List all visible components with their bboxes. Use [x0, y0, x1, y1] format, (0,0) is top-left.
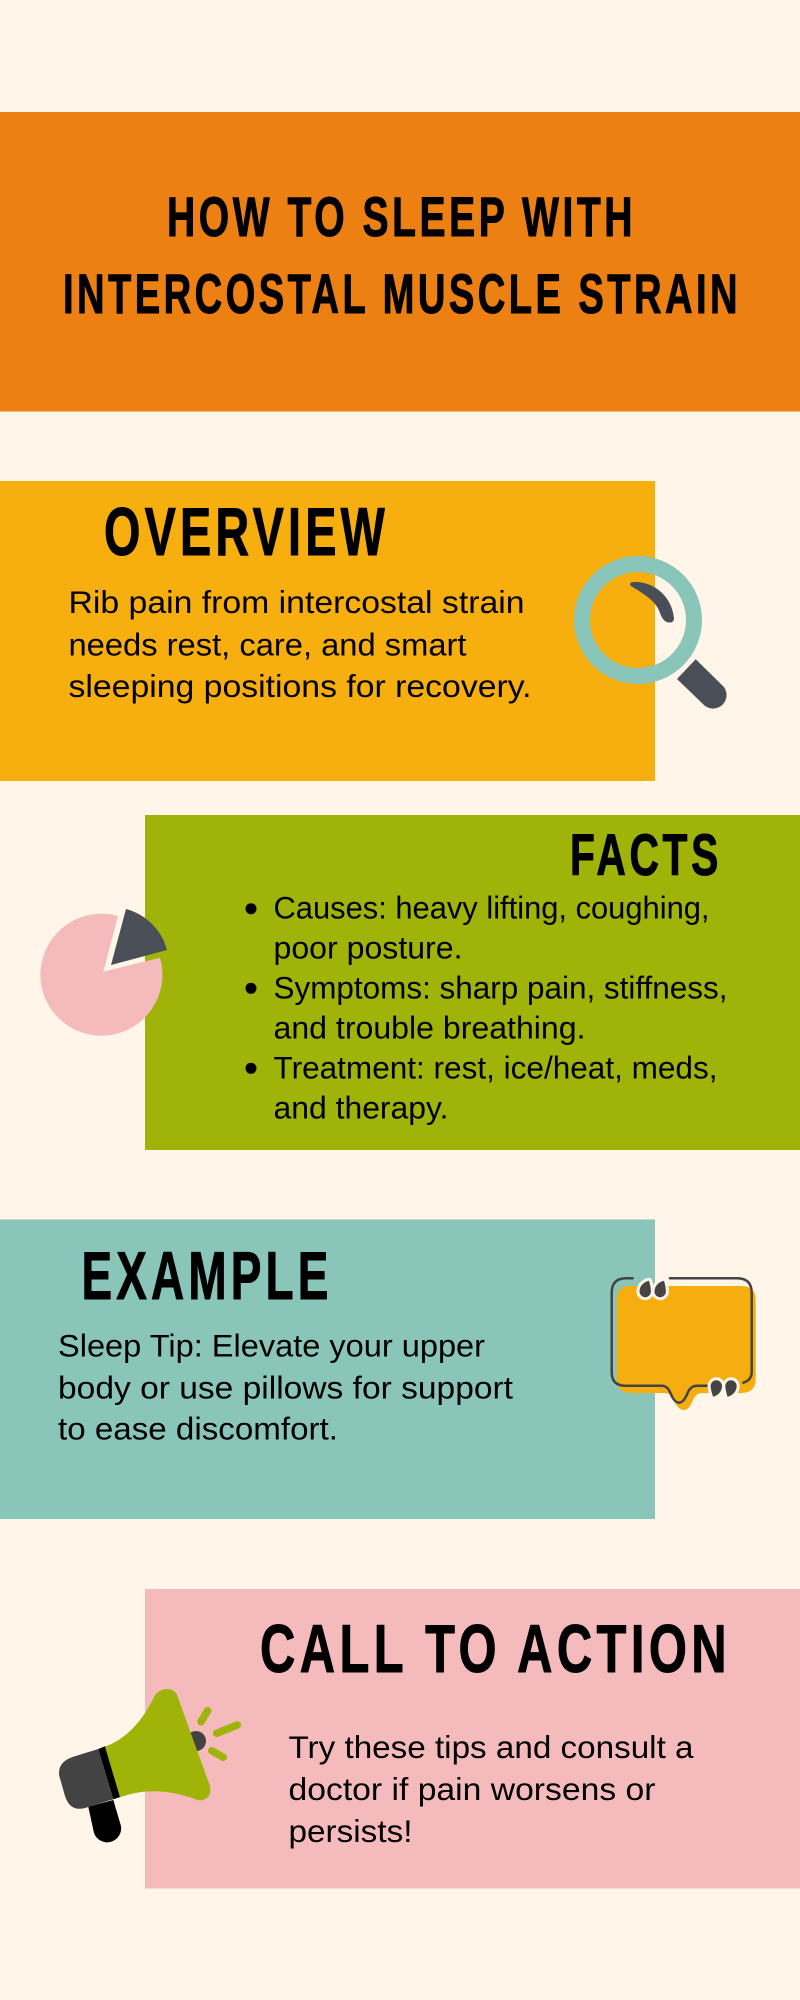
panel: example	[0, 1220, 655, 1519]
text: overview body: Rib pain from intercostal strain	[68, 584, 524, 620]
panel: title banner	[0, 112, 800, 412]
icon: magnifying glass	[582, 564, 727, 709]
title	[63, 185, 741, 325]
list: facts: poor posture.	[274, 929, 462, 965]
text: call to action body	[288, 1729, 694, 1849]
text: call to action body: persists!	[288, 1813, 412, 1849]
text: call to action body: doctor if pain worsens or	[288, 1771, 656, 1807]
heading: overview: OVERVIEW	[104, 494, 389, 570]
text: overview body: sleeping positions for recovery.	[68, 668, 532, 704]
heading: example: EXAMPLE	[82, 1238, 332, 1314]
icon: megaphone	[59, 1689, 237, 1842]
text: example body	[58, 1328, 513, 1446]
list: facts: and therapy.	[274, 1089, 448, 1125]
list: facts: and trouble breathing.	[274, 1009, 586, 1045]
heading: facts: FACTS	[570, 823, 722, 888]
panel: facts	[145, 815, 800, 1150]
panel: call to action	[145, 1589, 800, 1888]
text: call to action body: Try these tips and consult a	[288, 1729, 694, 1765]
text: example body: to ease discomfort.	[58, 1410, 338, 1446]
list: facts: Treatment: rest, ice/heat, meds,	[274, 1049, 718, 1085]
text: overview body: needs rest, care, and smart	[68, 626, 467, 662]
list: facts: Causes: heavy lifting, coughing,	[274, 889, 710, 925]
text: example body: body or use pillows for support	[58, 1369, 513, 1405]
icon: speech bubble	[612, 1278, 756, 1410]
list: facts	[246, 889, 728, 1125]
list: facts: Symptoms: sharp pain, stiffness,	[274, 969, 728, 1005]
icon: pie chart	[40, 909, 167, 1036]
text: example body: Sleep Tip: Elevate your upper	[58, 1328, 485, 1364]
text: overview body	[68, 584, 532, 704]
panel: overview	[0, 481, 655, 781]
